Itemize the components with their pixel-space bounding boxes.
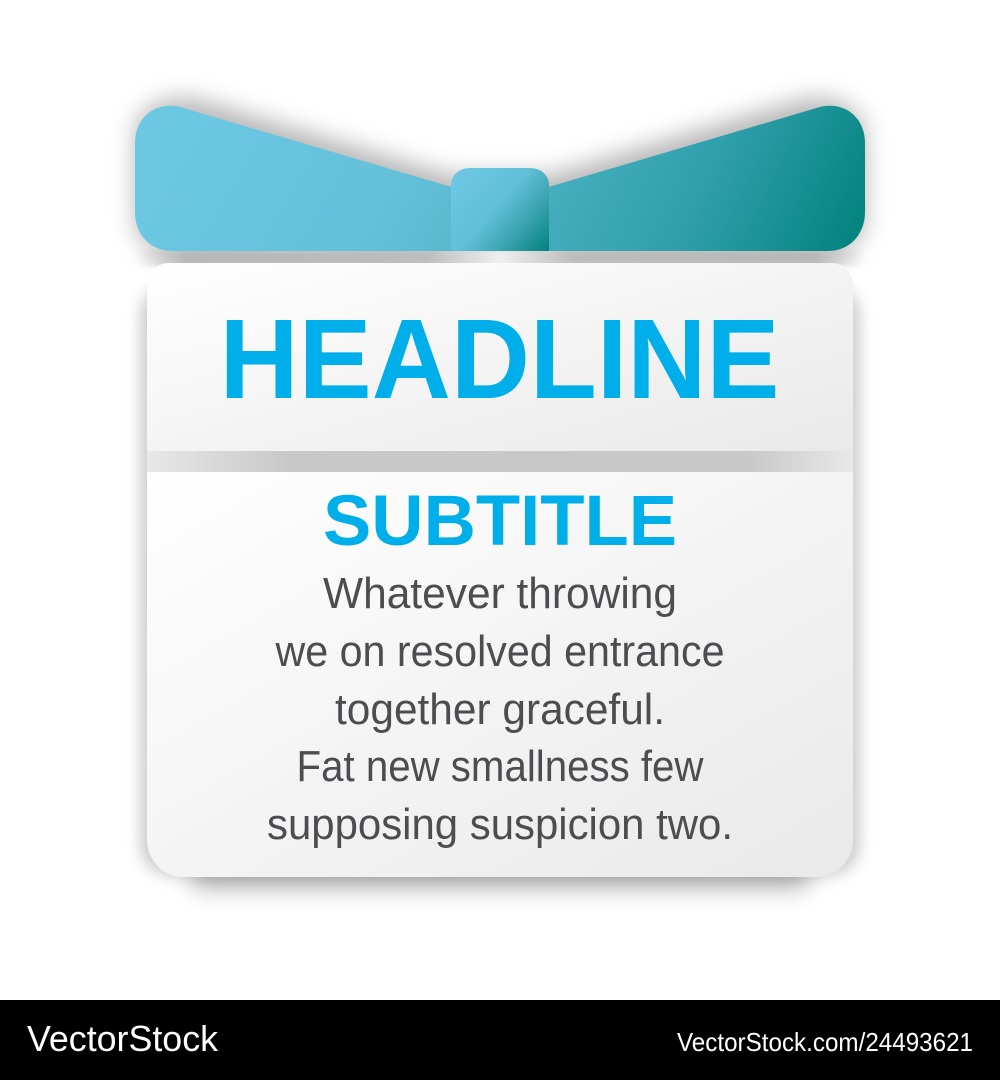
text block: body copy: Fat new smallness few [296,742,704,791]
shadow: body card bottom [190,855,810,887]
panel: headline card [147,263,853,451]
bow: centre knot [451,168,549,251]
footer: image id: VectorStock.com/24493621 [677,1027,973,1057]
footer bar [0,1000,1000,1080]
shadow: cards sides [141,285,859,875]
gap band between cards [147,451,853,472]
gift label graphic [135,98,865,887]
heading: subtitle: SUBTITLE [323,482,677,561]
footer: brand name: VectorStock [27,1018,219,1059]
band below bow [135,250,865,266]
text block: body copy: we on resolved entrance [275,627,724,676]
text block: body copy: Whatever throwing [323,569,677,618]
text block: body copy: together graceful. [335,685,665,734]
bow: right wing [545,106,865,251]
text block: body copy: supposing suspicion two. [267,800,733,849]
bow: left wing [135,106,455,251]
panel: body card [147,472,853,877]
heading: headline: HEADLINE [220,296,780,422]
shadow: bow [135,98,865,255]
text block: body copy [267,569,733,849]
